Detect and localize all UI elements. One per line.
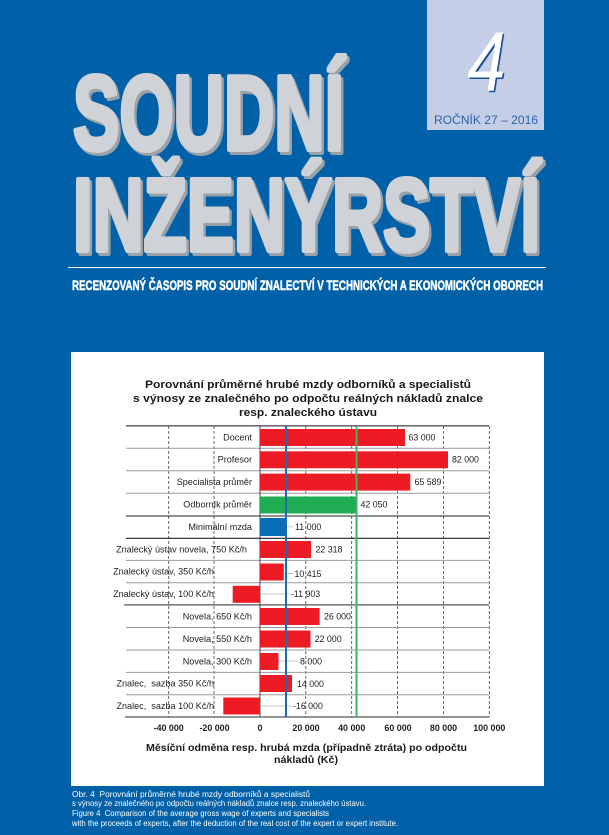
value labels: 22 000 [315,634,342,644]
axis title: nákladů (Kč) [274,754,338,766]
category labels: Znalec, sazba 100 Kč/h [116,701,214,711]
value labels: 42 050 [360,500,388,510]
value labels: 63 000 [408,432,436,442]
value labels: 10 415 [294,569,322,579]
category labels: Profesor [218,454,252,464]
axis title [146,743,467,766]
reference lines [285,426,287,717]
value labels [291,432,479,711]
chart heading: s výnosy ze znalečného po odpočtu reálných nákladů znalce [133,393,483,405]
caption [71,790,398,828]
axis title: Měsíční odměna resp. hrubá mzda (případně ztráta) po odpočtu [146,743,467,754]
x axis labels: -20 000 [199,723,230,733]
category labels: Odborník průměr [183,500,252,510]
value labels: 8 000 [300,656,322,666]
issue box: 4 [469,16,507,110]
leader lines [260,527,298,706]
value labels: -16 000 [293,701,323,711]
bars [223,429,448,714]
value labels: 14 000 [297,679,324,689]
title: SOUDNÍ: SOUDNÍ [73,54,346,172]
caption: Obr. 4 Porovnání průměrné hrubé mzdy odborníků a specialistů [72,790,310,799]
value labels: 82 000 [452,454,479,464]
category labels: Znalecký ústav novela, 750 Kč/h [116,544,247,554]
category labels: Znalec, sazba 350 Kč/h [116,678,214,688]
x axis labels: 60 000 [384,723,412,733]
x axis labels: 80 000 [430,723,457,733]
value labels: 11 000 [295,522,321,532]
value labels: 65 589 [414,477,442,487]
category labels: Novela, 300 Kč/h [183,656,252,666]
issue box: ROČNÍK 27 – 2016 [434,112,538,127]
value labels: -11 903 [291,589,320,599]
chart heading [133,379,483,419]
x axis labels: 40 000 [338,723,365,733]
x axis labels: 100 000 [473,723,505,733]
category labels: Docent [223,432,252,442]
category labels [113,432,253,711]
caption: Figure 4 Comparison of the average gross wage of experts and specialists [72,809,329,818]
issue box [427,0,544,130]
bar chart [113,426,505,733]
panel: chart [71,352,544,786]
caption: with the proceeds of experts, after the deduction of the real cost of the expert or expert institute. [71,819,398,828]
chart heading: Porovnání průměrné hrubé mzdy odborníků a specialistů [145,379,471,391]
title: SOUDNÍ: SOUDNÍ [76,58,348,176]
x axis labels [154,723,505,733]
chart heading: resp. znaleckého ústavu [239,407,377,419]
category labels: Minimální mzda [188,522,253,532]
category labels: Znalecký ústav, 100 Kč/h [113,589,214,599]
caption: s výnosy ze znalečného po odpočtu reálných nákladů znalce resp. znaleckého ústavu. [72,799,366,808]
value labels: 26 000 [324,612,351,622]
title: SOUDNÍ [73,54,348,176]
x axis labels: 0 [258,723,263,733]
x axis labels: 20 000 [292,723,320,733]
category labels: Novela, 550 Kč/h [183,634,252,644]
x axis labels: -40 000 [154,723,184,733]
category labels: Specialista průměr [177,477,252,487]
category labels: Novela, 650 Kč/h [183,612,252,622]
value labels: 22 318 [316,544,343,554]
issue box: 4 [468,14,506,108]
category labels: Znalecký ústav, 350 Kč/h [113,566,214,576]
